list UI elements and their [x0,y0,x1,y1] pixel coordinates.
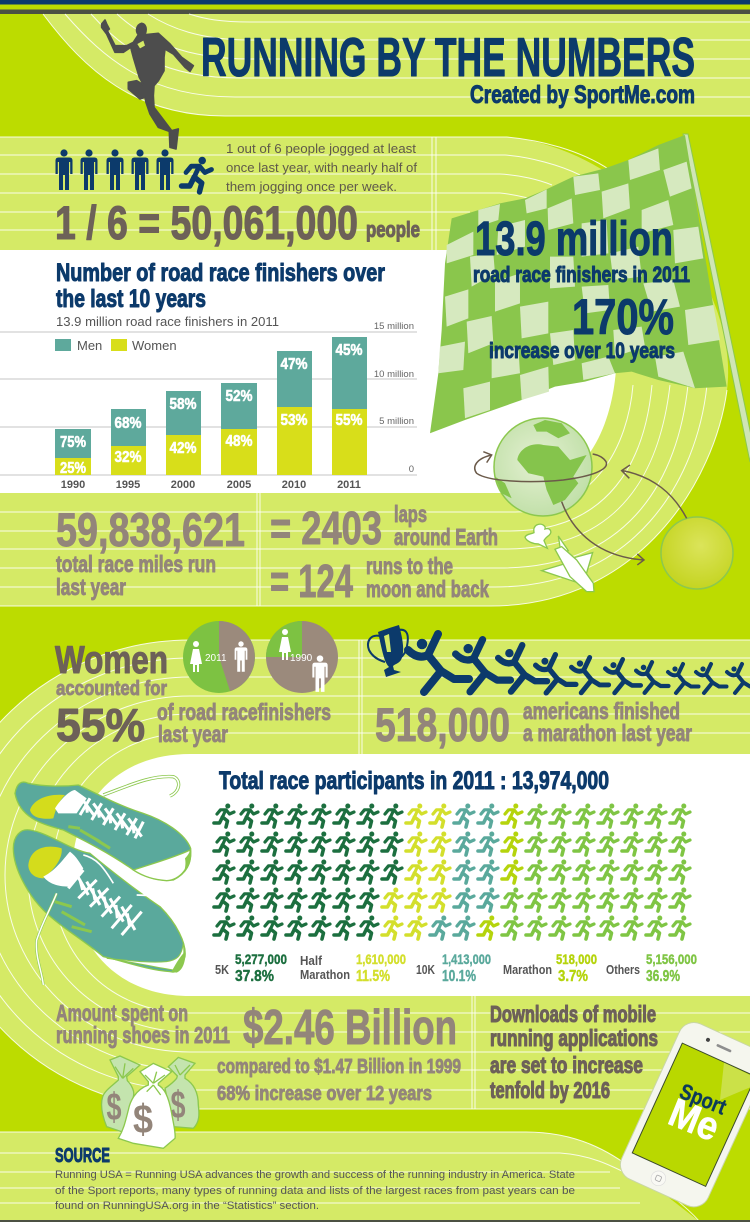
legend: race types: 5,277,000 [235,951,287,967]
stat: laps around earth: around Earth [394,524,498,550]
text: jogging fact: 1 out of 6 people jogged at least [226,142,417,156]
bar labels [60,342,362,477]
legend: race types: 10K [416,962,435,977]
bottom stripe [0,1220,750,1222]
bar labels: 45% [336,342,362,359]
icon: phone with app logo: Me [663,1091,725,1150]
year labels: 1990 [61,479,85,491]
stat: total race miles [56,503,245,600]
callout: 13.9 million finishers: increase over 10 years [489,338,675,363]
pie: 2011 [183,621,255,693]
bars [55,337,367,458]
icon: money bags [102,1056,199,1148]
bar labels: 53% [280,412,308,429]
icon: phone with app logo [615,1017,750,1212]
pie: 1990: 1990 [290,653,313,664]
text: jogging fact: once last year, with nearly half of [226,161,418,175]
legend: Women [132,338,177,353]
stat: running shoe spending: 68% increase over 12 years [217,1083,432,1105]
pie: 1990 [266,621,338,693]
stat: women share: last year [158,721,228,747]
bar labels: 58% [170,396,196,413]
bar labels: 68% [114,415,142,432]
text: source paragraph: Running USA = Running USA advances the growth and success of the running industry in America. State [55,1169,575,1181]
stat: running shoe spending: $2.46 Billion [243,1001,457,1055]
icon: five people standing and one jogger [56,149,212,192]
running track: upper band with right-hand bend [0,137,728,606]
bar labels: 42% [170,440,196,457]
icon: moon [661,517,733,589]
stat: marathon finishers: 518,000 [375,698,510,751]
icon: money bags: $ [170,1084,186,1127]
stat: laps around earth: laps [394,501,427,527]
callout: 13.9 million finishers: 170% [572,289,674,345]
icon: space shuttle and smoke puff [525,524,594,592]
legend: race types: Half [300,953,323,968]
legend: race types: 5K [215,962,230,977]
axis labels: 5 million [379,416,414,427]
callout: 13.9 million finishers: 13.9 million [475,213,673,266]
heading: total race participants: Total race participants in 2011 : 13,974,000 [219,767,609,795]
stat: runs to the moon: moon and back [366,576,489,602]
text: source paragraph [55,1169,575,1212]
stat: one in six equals people: 1 / 6 = 50,061,000 [55,196,358,249]
icon: running shoes [13,777,191,985]
stat: runs to the moon: = 124 [270,555,353,607]
bar labels: 25% [60,460,86,477]
callout: 13.9 million finishers [473,213,690,363]
bar labels: 52% [226,388,252,405]
stat: running shoe spending: Amount spent on [56,1000,188,1026]
axis labels: 15 million [374,321,414,332]
year labels: 1995 [116,479,140,491]
text: mobile downloads: are set to increase [490,1052,643,1078]
legend: race types: 11.5% [356,968,390,985]
bar labels: 55% [336,412,362,429]
running track: source band [0,1132,700,1222]
icon: phone with app logo: Sport [676,1078,731,1120]
icon: trophy [368,625,408,677]
legend: Men [77,338,102,353]
stat: runs to the moon [270,553,489,607]
arrows: earth to moon and back [562,465,687,565]
icon: earth with orbit [475,418,606,516]
year labels: 2010 [282,479,306,491]
year labels [61,479,361,491]
gridlines [0,332,417,475]
legend: race types: Others [606,962,640,977]
legend: race types: 3.7% [558,968,588,985]
text: jogging fact [226,142,418,194]
icon: checkered flag [430,134,750,462]
icon: money bags: $ [133,1096,153,1142]
text: mobile downloads: Downloads of mobile [490,1001,656,1027]
bar labels: 48% [226,433,252,450]
stat: marathon finishers: a marathon last year [523,720,692,746]
icon: row of marathon runners [408,634,750,693]
stat: one in six equals people: people [366,217,420,242]
legend: race types: 36.9% [646,968,680,985]
icon: money bags: $ [106,1086,122,1129]
year labels: 2011 [337,479,361,491]
callout: 13.9 million finishers: road race finishers in 2011 [473,262,690,287]
text: source paragraph: found on RunningUSA.org in the “Statistics” section. [55,1200,319,1212]
legend: race types: 518,000 [556,951,597,967]
chart heading: the last 10 years [56,285,206,313]
stat: laps around earth: = 2403 [270,502,382,554]
stat: women share: of road racefinishers [157,699,331,725]
stat: women share [55,639,331,751]
year labels: 2000 [171,479,195,491]
axis labels [374,321,414,475]
bar labels: 32% [114,449,142,466]
legend: race types: 1,413,000 [442,951,491,967]
running track: lower band with left-hand bend [0,640,750,1109]
stat: marathon finishers: americans finished [523,698,680,724]
text: jogging fact: them jogging once per week. [226,180,397,194]
stat: running shoe spending [56,1000,461,1105]
year labels: 2005 [227,479,251,491]
top stripes [0,0,750,14]
text: mobile downloads: tenfold by 2016 [490,1077,610,1103]
stat: marathon finishers [375,698,692,751]
pictogram: 100 runners [214,806,690,939]
legend: race types: 1,610,000 [356,951,406,967]
stat: total race miles: last year [56,574,126,600]
panel: chart white background [0,250,616,493]
axis labels: 10 million [374,369,414,380]
pie: 2011: 2011 [205,653,227,664]
stat: women share: Women [55,639,168,682]
chart heading [56,259,385,329]
stat: women share: accounted for [56,678,167,700]
panel: participants white background [72,754,750,996]
running track: header band [43,14,750,116]
chart heading: 13.9 million road race finishers in 2011 [56,315,279,329]
text: source paragraph: of the Sport reports, many types of running data and lists of the largest races from past years can be [55,1185,575,1197]
legend: race types: 37.8% [235,968,274,985]
text: mobile downloads [490,1001,658,1103]
chart heading: Number of road race finishers over [56,259,385,287]
legend: race types [215,951,697,985]
legend: race types: 5,156,000 [646,951,697,967]
legend: race types: Marathon [300,967,350,982]
stat: running shoe spending: compared to $1.47 Billion in 1999 [217,1056,461,1078]
legend: race types: 10.1% [442,968,476,985]
stat: laps around earth [270,501,498,554]
icon: sprinter silhouette [102,20,193,149]
heading: source: SOURCE [55,1145,110,1167]
stat: total race miles: total race miles run [56,551,216,577]
stat: women share: 55% [56,699,145,751]
axis labels: 0 [409,464,414,475]
bar labels: 47% [280,356,308,373]
legend: race types: Marathon [503,962,552,977]
chart: road race finishers [0,259,417,491]
bar labels: 75% [60,434,86,451]
legend [55,338,177,353]
stat: runs to the moon: runs to the [366,553,453,579]
text: mobile downloads: running applications [490,1025,658,1051]
stat: running shoe spending: running shoes in 2011 [56,1022,230,1048]
stat: total race miles: 59,838,621 [56,503,245,556]
